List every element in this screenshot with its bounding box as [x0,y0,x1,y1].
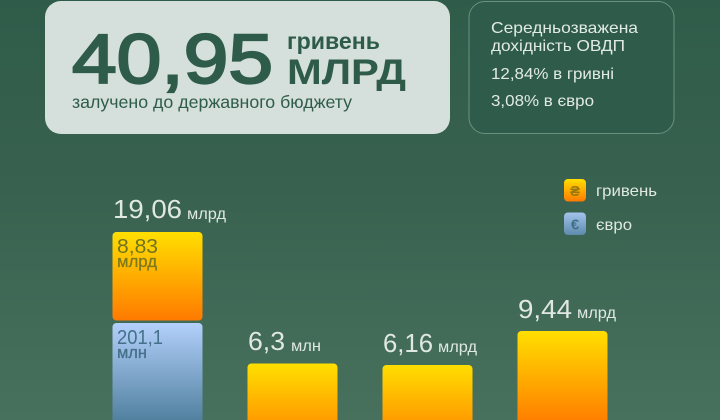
bar column: 19,06 млрд [112,194,226,420]
legend: euro [564,212,632,235]
value label [248,326,321,356]
bar [382,365,472,420]
icon: hryvnia: ₴ [570,183,580,200]
bar column: 6,16 млрд [382,328,477,420]
bar segment: hryvnia: 8,83 [117,236,158,258]
value label [383,328,477,358]
bar segment: euro: 201,1 [117,327,163,349]
currency word: гривень [287,28,380,54]
hryvnia yield: 12,84% в гривні [491,66,614,83]
yield heading line 2: дохідність ОВДП [491,38,625,55]
value label: млн [291,338,321,355]
value label: млрд [438,339,477,356]
euro yield: 3,08% в євро [491,93,594,110]
legend label: hryvnia: гривень [596,183,657,200]
legend: hryvnia [564,179,657,202]
value label: 6,16 [383,328,433,358]
bar column: 9,44 млрд [518,294,616,420]
panel: weighted average yield [469,2,674,134]
bar column: 6,3 млн [248,326,338,420]
value label: 9,44 [518,294,572,324]
value label: 6,3 [248,326,285,356]
value label: млрд [577,305,616,322]
bar segment: hryvnia: млрд [117,253,157,271]
yield heading: Середньозважена [491,20,638,37]
bar segment: hryvnia [112,232,202,320]
panel: total raised [45,1,450,134]
value label: 19,06 [113,194,182,224]
value label [113,194,226,224]
bar segment: euro [112,323,202,420]
bar segment: euro: млн [117,344,147,362]
caption: залучено до державного бюджету [72,92,352,112]
value label: млрд [187,206,226,223]
icon: euro: € [571,216,580,234]
big number: 40,95 [72,20,273,98]
unit: МЛРД [287,53,406,92]
bar [518,331,608,420]
value label [518,294,616,324]
legend label: euro: євро [596,217,632,234]
bar [248,364,338,420]
